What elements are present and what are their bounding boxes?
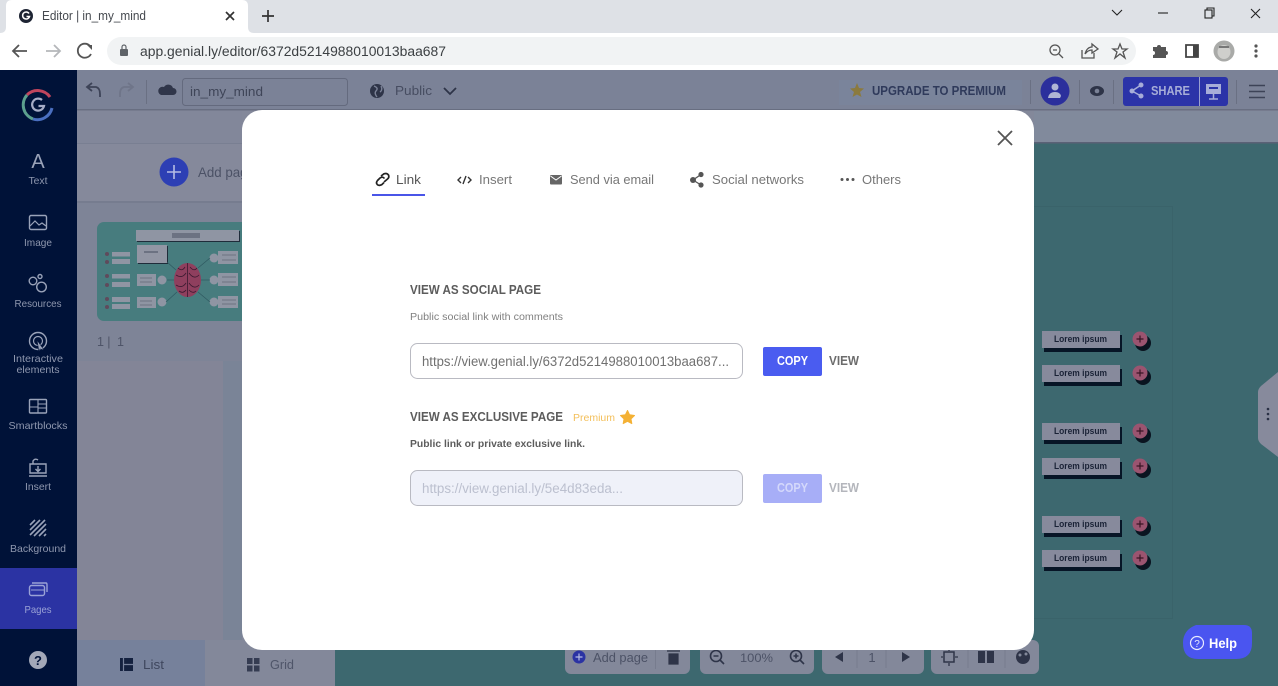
close button <box>998 131 1012 145</box>
premium badge <box>573 410 634 424</box>
tab: others: Others <box>862 173 901 187</box>
tab: social networks <box>690 172 804 188</box>
project name input: in_my_mind <box>190 84 263 99</box>
teal slide canvas <box>335 142 1278 686</box>
address bar: app.genial.ly/editor/6372d5214988010013baa687 <box>140 44 446 59</box>
pages panel: add page header <box>77 111 255 203</box>
grid tab: Grid <box>270 657 294 672</box>
nav item: pages (active): Pages <box>24 604 52 616</box>
page navigation group <box>822 640 924 674</box>
help icon: ? <box>34 653 42 668</box>
zoom controls group: 100% <box>740 651 773 665</box>
copy button (disabled) <box>763 474 822 503</box>
list tab: List <box>143 657 164 672</box>
grey canvas strip above slide <box>1034 111 1278 143</box>
nav item: text: Text <box>28 175 48 187</box>
plus marker 6 <box>1132 550 1151 570</box>
new tab button <box>262 10 274 22</box>
profile avatar <box>1214 40 1234 62</box>
active browser tab <box>0 0 254 33</box>
tab: send via email: Send via email <box>570 173 654 187</box>
project name input <box>182 78 348 106</box>
editor top bar <box>77 70 1278 110</box>
copy button <box>763 347 822 376</box>
lorem ipsum button 1 <box>1042 331 1122 352</box>
nav item: insert: Insert <box>25 481 51 493</box>
page counter: 1 | 1 <box>97 335 124 349</box>
browser action icons <box>1050 44 1127 58</box>
description: exclusive link: Public link or private exclusive link. <box>410 439 585 450</box>
list and grid view tabs <box>77 640 335 686</box>
view link: VIEW <box>829 354 859 368</box>
nav item: background: Background <box>10 543 66 555</box>
tab: others <box>840 173 901 187</box>
public visibility selector: Public <box>395 83 433 98</box>
hamburger menu icon <box>1249 86 1265 98</box>
share button: SHARE <box>1151 83 1190 98</box>
nav item: text: A <box>31 151 45 173</box>
premium badge: Premium <box>573 413 615 424</box>
nav item: resources: Resources <box>14 298 62 310</box>
grid tab <box>205 640 335 686</box>
nav item: background <box>10 520 66 555</box>
pages panel: thumbnail row <box>77 203 257 361</box>
nav item: resources <box>14 274 62 310</box>
nav item: pages (active) <box>0 568 77 629</box>
upgrade to premium button: UPGRADE TO PREMIUM <box>872 84 1006 98</box>
share dialog <box>242 110 1034 650</box>
lorem ipsum button 5: Lorem ipsum <box>1054 519 1107 529</box>
tab: link (active): Link <box>396 173 422 187</box>
bottom editor toolbar <box>565 640 1039 674</box>
lorem ipsum button 4: Lorem ipsum <box>1054 461 1107 471</box>
social link input: https://view.genial.ly/6372d5214988010013baa687... <box>422 354 729 369</box>
nav item: interactive elements: Interactive <box>13 353 63 365</box>
help chat button <box>1183 625 1252 659</box>
window controls <box>1112 8 1260 18</box>
address bar <box>107 37 1136 65</box>
slide buttons: lorem ipsum and plus markers <box>1042 331 1151 571</box>
active browser tab: Editor | in_my_mind <box>42 9 146 23</box>
left navigation sidebar <box>0 70 77 686</box>
view link (disabled): VIEW <box>829 481 859 495</box>
plus marker 4 <box>1132 458 1151 478</box>
heading: view as exclusive page: VIEW AS EXCLUSIVE PAGE <box>410 410 563 424</box>
nav item: interactive elements <box>13 332 63 376</box>
pages panel: lower empty area <box>77 361 223 640</box>
pages panel: add page header: Add page <box>198 164 255 180</box>
plus marker 2 <box>1132 366 1151 385</box>
add page and delete group <box>565 640 690 674</box>
nav item: insert <box>25 459 51 493</box>
browser tab strip <box>0 0 1278 33</box>
lorem ipsum button 6 <box>1042 550 1122 571</box>
exclusive link input (disabled): https://view.genial.ly/5e4d83eda... <box>422 481 623 496</box>
tab: insert: Insert <box>479 173 513 187</box>
view tools group <box>931 640 1039 674</box>
help chat button: Help <box>1209 635 1237 651</box>
tab: link (active) <box>372 173 425 196</box>
lorem ipsum button 5 <box>1042 516 1122 537</box>
back, forward and reload icons <box>13 44 92 58</box>
cloud saved icon <box>158 85 176 95</box>
nav item: smartblocks: Smartblocks <box>8 420 68 432</box>
plus marker 5 <box>1132 516 1151 536</box>
heading: view as social page: VIEW AS SOCIAL PAGE <box>410 283 541 297</box>
genially logo <box>23 91 52 120</box>
plus marker 3 <box>1132 424 1151 443</box>
nav item: text <box>28 151 48 187</box>
preview eye icon <box>1090 86 1104 96</box>
tab: insert <box>458 173 513 187</box>
nav item: interactive elements: elements <box>16 364 60 376</box>
zoom controls group <box>700 640 814 674</box>
lorem ipsum button 4 <box>1042 458 1122 479</box>
browser address toolbar <box>0 33 1278 70</box>
social link input <box>410 344 742 378</box>
copy button (disabled): COPY <box>777 481 809 495</box>
browser menu dots <box>1254 44 1258 58</box>
lorem ipsum button 6: Lorem ipsum <box>1054 553 1107 563</box>
nav item: image: Image <box>24 237 52 249</box>
lorem ipsum button 3 <box>1042 423 1122 444</box>
copy button: COPY <box>777 354 809 368</box>
description: social link: Public social link with comments <box>410 312 563 323</box>
nav item: image <box>24 216 52 249</box>
tab: social networks: Social networks <box>712 173 804 187</box>
upgrade to premium button <box>839 80 1022 105</box>
slide thumbnail <box>97 222 257 321</box>
list tab <box>77 640 205 686</box>
plus marker 1 <box>1132 332 1151 351</box>
share button <box>1123 77 1228 106</box>
right side panel handle <box>1258 372 1278 457</box>
add page and delete group: Add page <box>593 650 648 665</box>
exclusive link input (disabled) <box>410 470 742 506</box>
lorem ipsum button 1: Lorem ipsum <box>1054 334 1107 344</box>
page navigation group: 1 <box>868 650 876 665</box>
lorem ipsum button 2: Lorem ipsum <box>1054 368 1107 378</box>
help icon <box>29 651 47 669</box>
undo and redo icons <box>87 83 133 97</box>
nav item: smartblocks <box>8 400 68 432</box>
lorem ipsum button 2 <box>1042 365 1122 386</box>
brain illustration <box>174 263 201 297</box>
public visibility selector <box>370 83 456 98</box>
collaborator button <box>1040 76 1070 106</box>
lorem ipsum button 3: Lorem ipsum <box>1054 426 1107 436</box>
help chat button: ? <box>1194 639 1200 650</box>
